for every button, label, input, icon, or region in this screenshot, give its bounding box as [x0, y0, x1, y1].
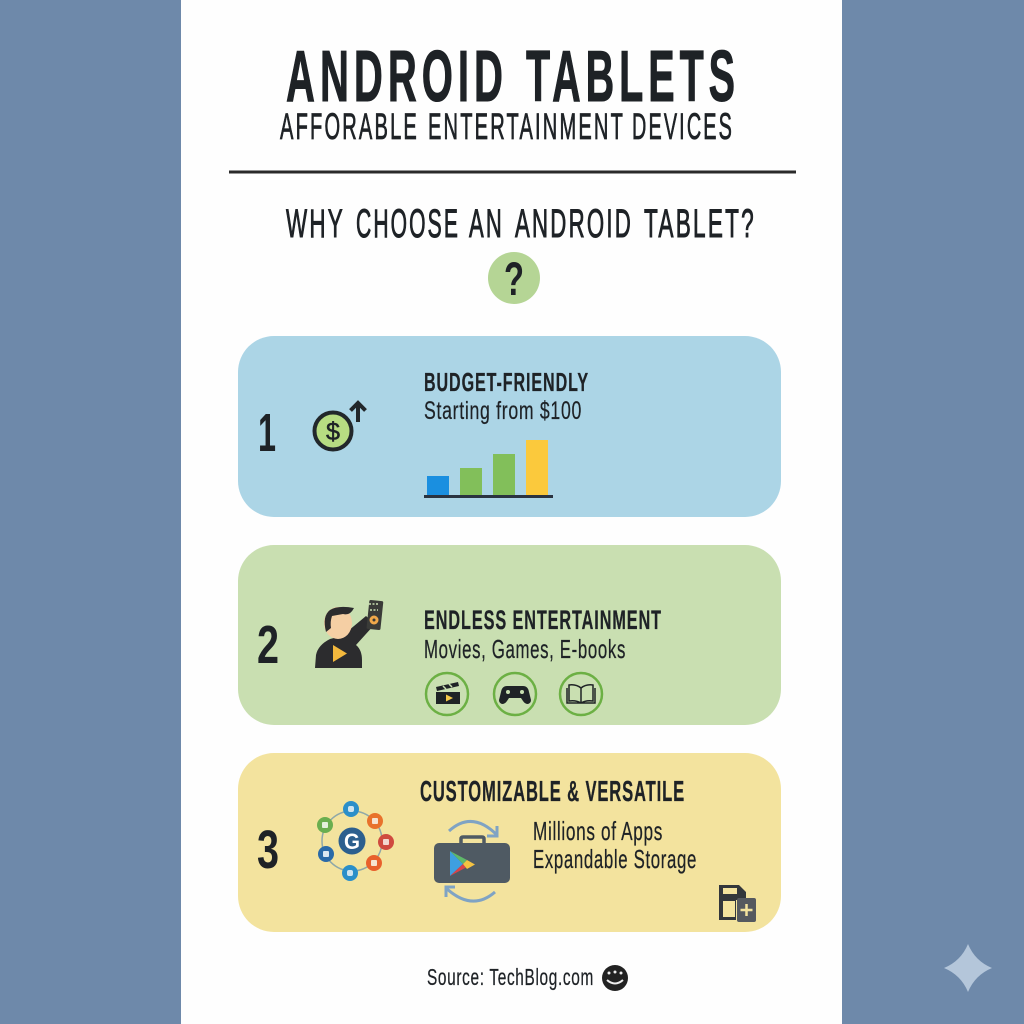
subtitle	[280, 106, 734, 147]
panel: budget-friendly	[238, 336, 781, 517]
icon: game controller	[494, 673, 536, 715]
icon: briefcase with play logo	[434, 821, 510, 901]
number 1: 1	[258, 403, 276, 463]
heading: customizable and versatile: CUSTOMIZABLE & VERSATILE	[420, 776, 685, 808]
panel: customizable and versatile	[238, 753, 781, 932]
section heading	[286, 202, 756, 246]
panel: endless entertainment	[238, 545, 781, 725]
subtitle: ENTERTAINMENT	[428, 106, 625, 147]
icon: smiley badge	[602, 965, 628, 991]
icon: dollar coin with arrow: $	[326, 418, 340, 446]
icon: person with remote	[315, 600, 383, 668]
number 2: 2	[257, 615, 279, 675]
section heading: WHY	[286, 202, 345, 246]
text: expandable storage: Expandable Storage	[533, 844, 697, 874]
icon: question mark	[488, 252, 540, 305]
icon: dollar coin with arrow	[314, 403, 366, 450]
section heading: CHOOSE	[356, 202, 460, 246]
section heading: TABLET?	[644, 202, 756, 246]
subtitle: AFFORABLE	[280, 106, 419, 147]
bar chart	[424, 440, 553, 498]
icon: app network: G	[344, 829, 360, 854]
icon: question mark: ?	[504, 252, 524, 305]
title: ANDROID	[286, 37, 508, 117]
heading: endless entertainment: ENDLESS ENTERTAINMENT	[424, 605, 662, 635]
section heading: AN	[469, 202, 504, 246]
white centre panel	[181, 0, 842, 1024]
icon: SD card with plus	[719, 885, 756, 922]
number 3: 3	[257, 820, 279, 880]
text: millions of apps: Millions of Apps	[533, 816, 663, 846]
text: movies games ebooks: Movies, Games, E-books	[424, 634, 626, 664]
icon: open book	[560, 673, 602, 715]
subtitle: DEVICES	[632, 106, 734, 147]
section heading: ANDROID	[515, 202, 633, 246]
heading: budget-friendly: BUDGET-FRIENDLY	[424, 367, 589, 397]
icon: sparkle	[944, 944, 992, 992]
text: starting price: Starting from $100	[424, 397, 582, 425]
source line: Source: TechBlog.com	[427, 964, 594, 990]
icon: app network	[317, 801, 394, 881]
title: TABLETS	[526, 37, 740, 117]
icon: clapperboard	[426, 673, 468, 715]
